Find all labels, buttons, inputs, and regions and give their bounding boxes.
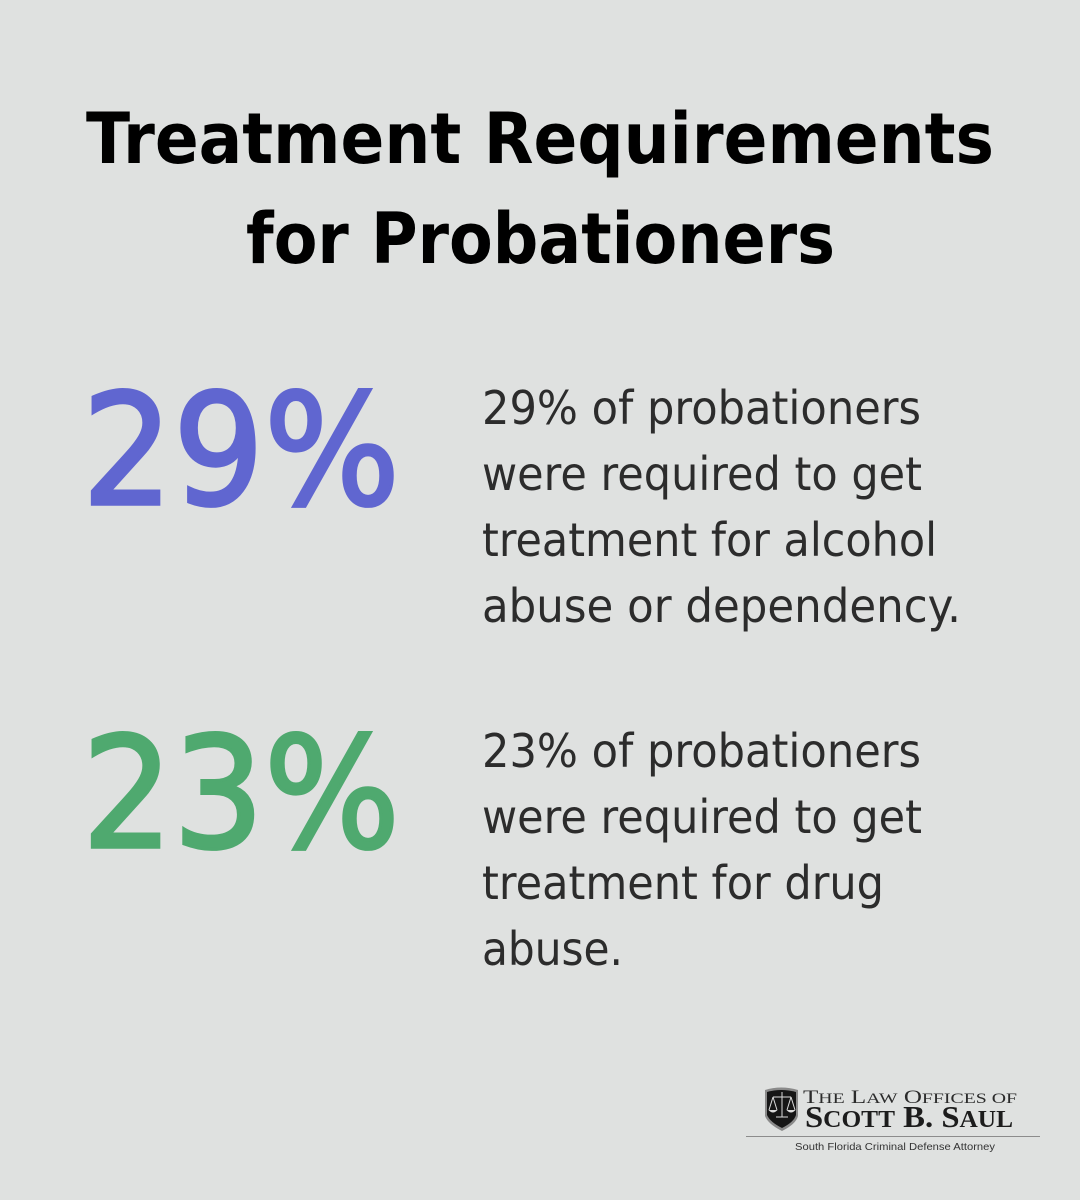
big number: 23%: 23%	[82, 705, 400, 884]
logo tagline: South Florida Criminal Defense Attorney	[795, 1141, 996, 1153]
description: drug treatment: abuse.	[482, 922, 623, 976]
stat: 29% alcohol treatment	[82, 362, 961, 633]
logo: law offices of Scott B. Saul	[746, 1087, 1040, 1153]
big number: 29%: 29%	[82, 362, 400, 541]
description: alcohol treatment	[482, 381, 961, 633]
logo divider	[746, 1136, 1040, 1137]
title: for Probationers	[246, 198, 835, 280]
logo text: Scott B. Saul: SCOTT B. SAUL	[805, 1099, 1013, 1134]
description: drug treatment: 23% of probationers	[482, 724, 921, 778]
description: drug treatment: treatment for drug	[482, 856, 884, 910]
title	[86, 98, 994, 280]
description: alcohol treatment: treatment for alcohol	[482, 513, 937, 567]
description: alcohol treatment: 29% of probationers	[482, 381, 921, 435]
description: drug treatment	[482, 724, 922, 976]
title: Treatment Requirements	[86, 98, 994, 180]
stat: 23% drug treatment	[82, 705, 922, 976]
description: alcohol treatment: were required to get	[482, 447, 922, 501]
description: alcohol treatment: abuse or dependency.	[482, 579, 961, 633]
description: drug treatment: were required to get	[482, 790, 922, 844]
icon: shield with scales	[765, 1088, 798, 1131]
logo text: the law offices of: THE L AW O FFICES OF	[803, 1087, 1017, 1108]
